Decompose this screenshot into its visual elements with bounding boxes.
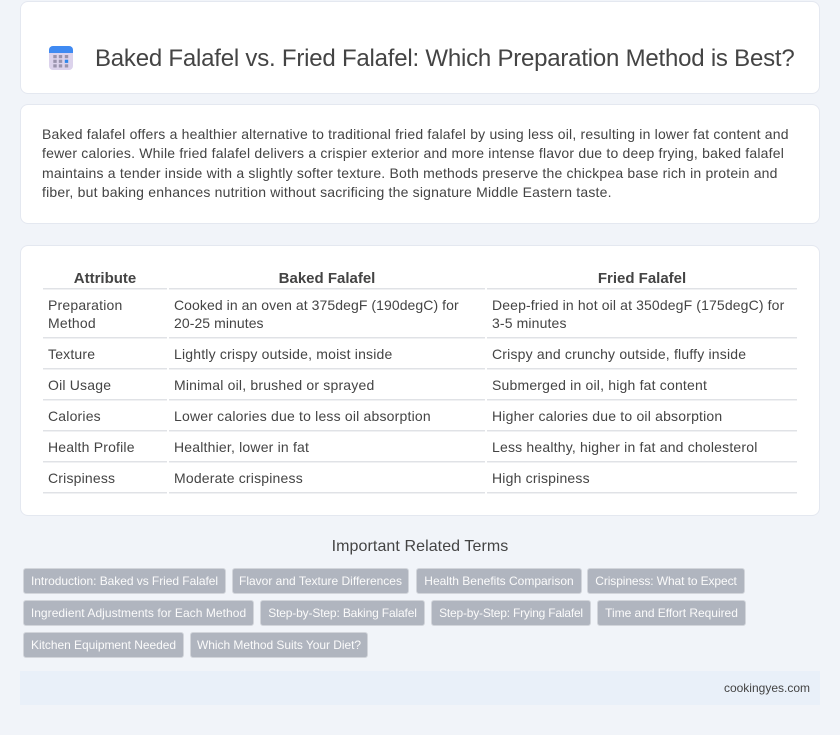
tag: Introduction: Baked vs Fried Falafel xyxy=(31,574,218,588)
intro paragraph xyxy=(42,126,789,200)
row: oil usage xyxy=(48,377,707,393)
title: Baked Falafel vs. Fried Falafel: Which Preparation Method is Best? xyxy=(95,45,794,72)
tag: Time and Effort Required xyxy=(605,606,738,620)
tag: Step-by-Step: Frying Falafel xyxy=(439,606,583,620)
row: preparation method: 3-5 minutes xyxy=(492,315,567,331)
column headers: Baked Falafel xyxy=(279,270,375,287)
row: texture: Crispy and crunchy outside, fluffy inside xyxy=(492,346,746,362)
row: crispiness: Crispiness xyxy=(48,470,115,486)
tag: Kitchen Equipment Needed xyxy=(31,638,176,652)
related terms tags xyxy=(23,568,746,658)
tag xyxy=(23,568,226,594)
row: preparation method: 20-25 minutes xyxy=(174,315,264,331)
row: crispiness: Moderate crispiness xyxy=(174,470,303,486)
row: texture: Lightly crispy outside, moist inside xyxy=(174,346,392,362)
intro paragraph: fewer calories. While fried falafel delivers a crispier exterior and more intense flavor due to deep frying, baked falafel xyxy=(42,145,784,161)
tag: Step-by-Step: Baking Falafel xyxy=(268,606,417,620)
row: calories: Lower calories due to less oil absorption xyxy=(174,408,431,424)
tag xyxy=(23,600,254,626)
intro paragraph: Baked falafel offers a healthier alternative to traditional fried falafel by using less oil, resulting in lower fat content and xyxy=(42,126,789,142)
intro paragraph: fiber, but baking enhances nutrition without sacrificing the signature Middle Eastern taste. xyxy=(42,184,612,200)
tag xyxy=(23,632,184,658)
tag: Health Benefits Comparison xyxy=(424,574,574,588)
footer bar xyxy=(20,671,820,705)
row: oil usage: Submerged in oil, high fat content xyxy=(492,377,707,393)
tag xyxy=(190,632,368,658)
row: calories: Higher calories due to oil absorption xyxy=(492,408,722,424)
intro paragraph: maintains a tender inside with a slightly softer texture. Both methods preserve the chickpea base rich in protein and xyxy=(42,165,778,181)
tag xyxy=(587,568,745,594)
tag xyxy=(260,600,425,626)
row: preparation method xyxy=(48,297,784,331)
row: oil usage: Minimal oil, brushed or sprayed xyxy=(174,377,374,393)
row: texture: Texture xyxy=(48,346,95,362)
row: calories xyxy=(48,408,722,424)
row: health profile xyxy=(48,439,758,455)
tag: Which Method Suits Your Diet? xyxy=(197,638,361,652)
row: health profile: Less healthy, higher in fat and cholesterol xyxy=(492,439,758,455)
row: health profile: Healthier, lower in fat xyxy=(174,439,309,455)
row: crispiness: High crispiness xyxy=(492,470,590,486)
tag xyxy=(597,600,746,626)
tag xyxy=(431,600,591,626)
column headers xyxy=(74,270,686,287)
tag: Crispiness: What to Expect xyxy=(595,574,737,588)
related terms heading: Important Related Terms xyxy=(332,538,508,555)
row: preparation method: Preparation xyxy=(48,297,122,313)
intro card xyxy=(20,104,820,224)
row: texture xyxy=(48,346,746,362)
column headers: Fried Falafel xyxy=(598,270,686,287)
row: health profile: Health Profile xyxy=(48,439,135,455)
row: oil usage: Oil Usage xyxy=(48,377,111,393)
title card xyxy=(20,1,820,94)
row: preparation method: Deep-fried in hot oil at 350degF (175degC) for xyxy=(492,297,784,313)
row: calories: Calories xyxy=(48,408,101,424)
row: crispiness xyxy=(48,470,590,486)
column headers: Attribute xyxy=(74,270,136,287)
footer source: cookingyes.com xyxy=(724,681,810,695)
tag: Ingredient Adjustments for Each Method xyxy=(31,606,246,620)
tag xyxy=(416,568,582,594)
tag: Flavor and Texture Differences xyxy=(239,574,402,588)
comparison table card xyxy=(20,245,820,516)
tag xyxy=(232,568,409,594)
row: preparation method: Cooked in an oven at 375degF (190degC) for xyxy=(174,297,459,313)
icon: calendar xyxy=(49,46,73,70)
row: preparation method: Method xyxy=(48,315,96,331)
